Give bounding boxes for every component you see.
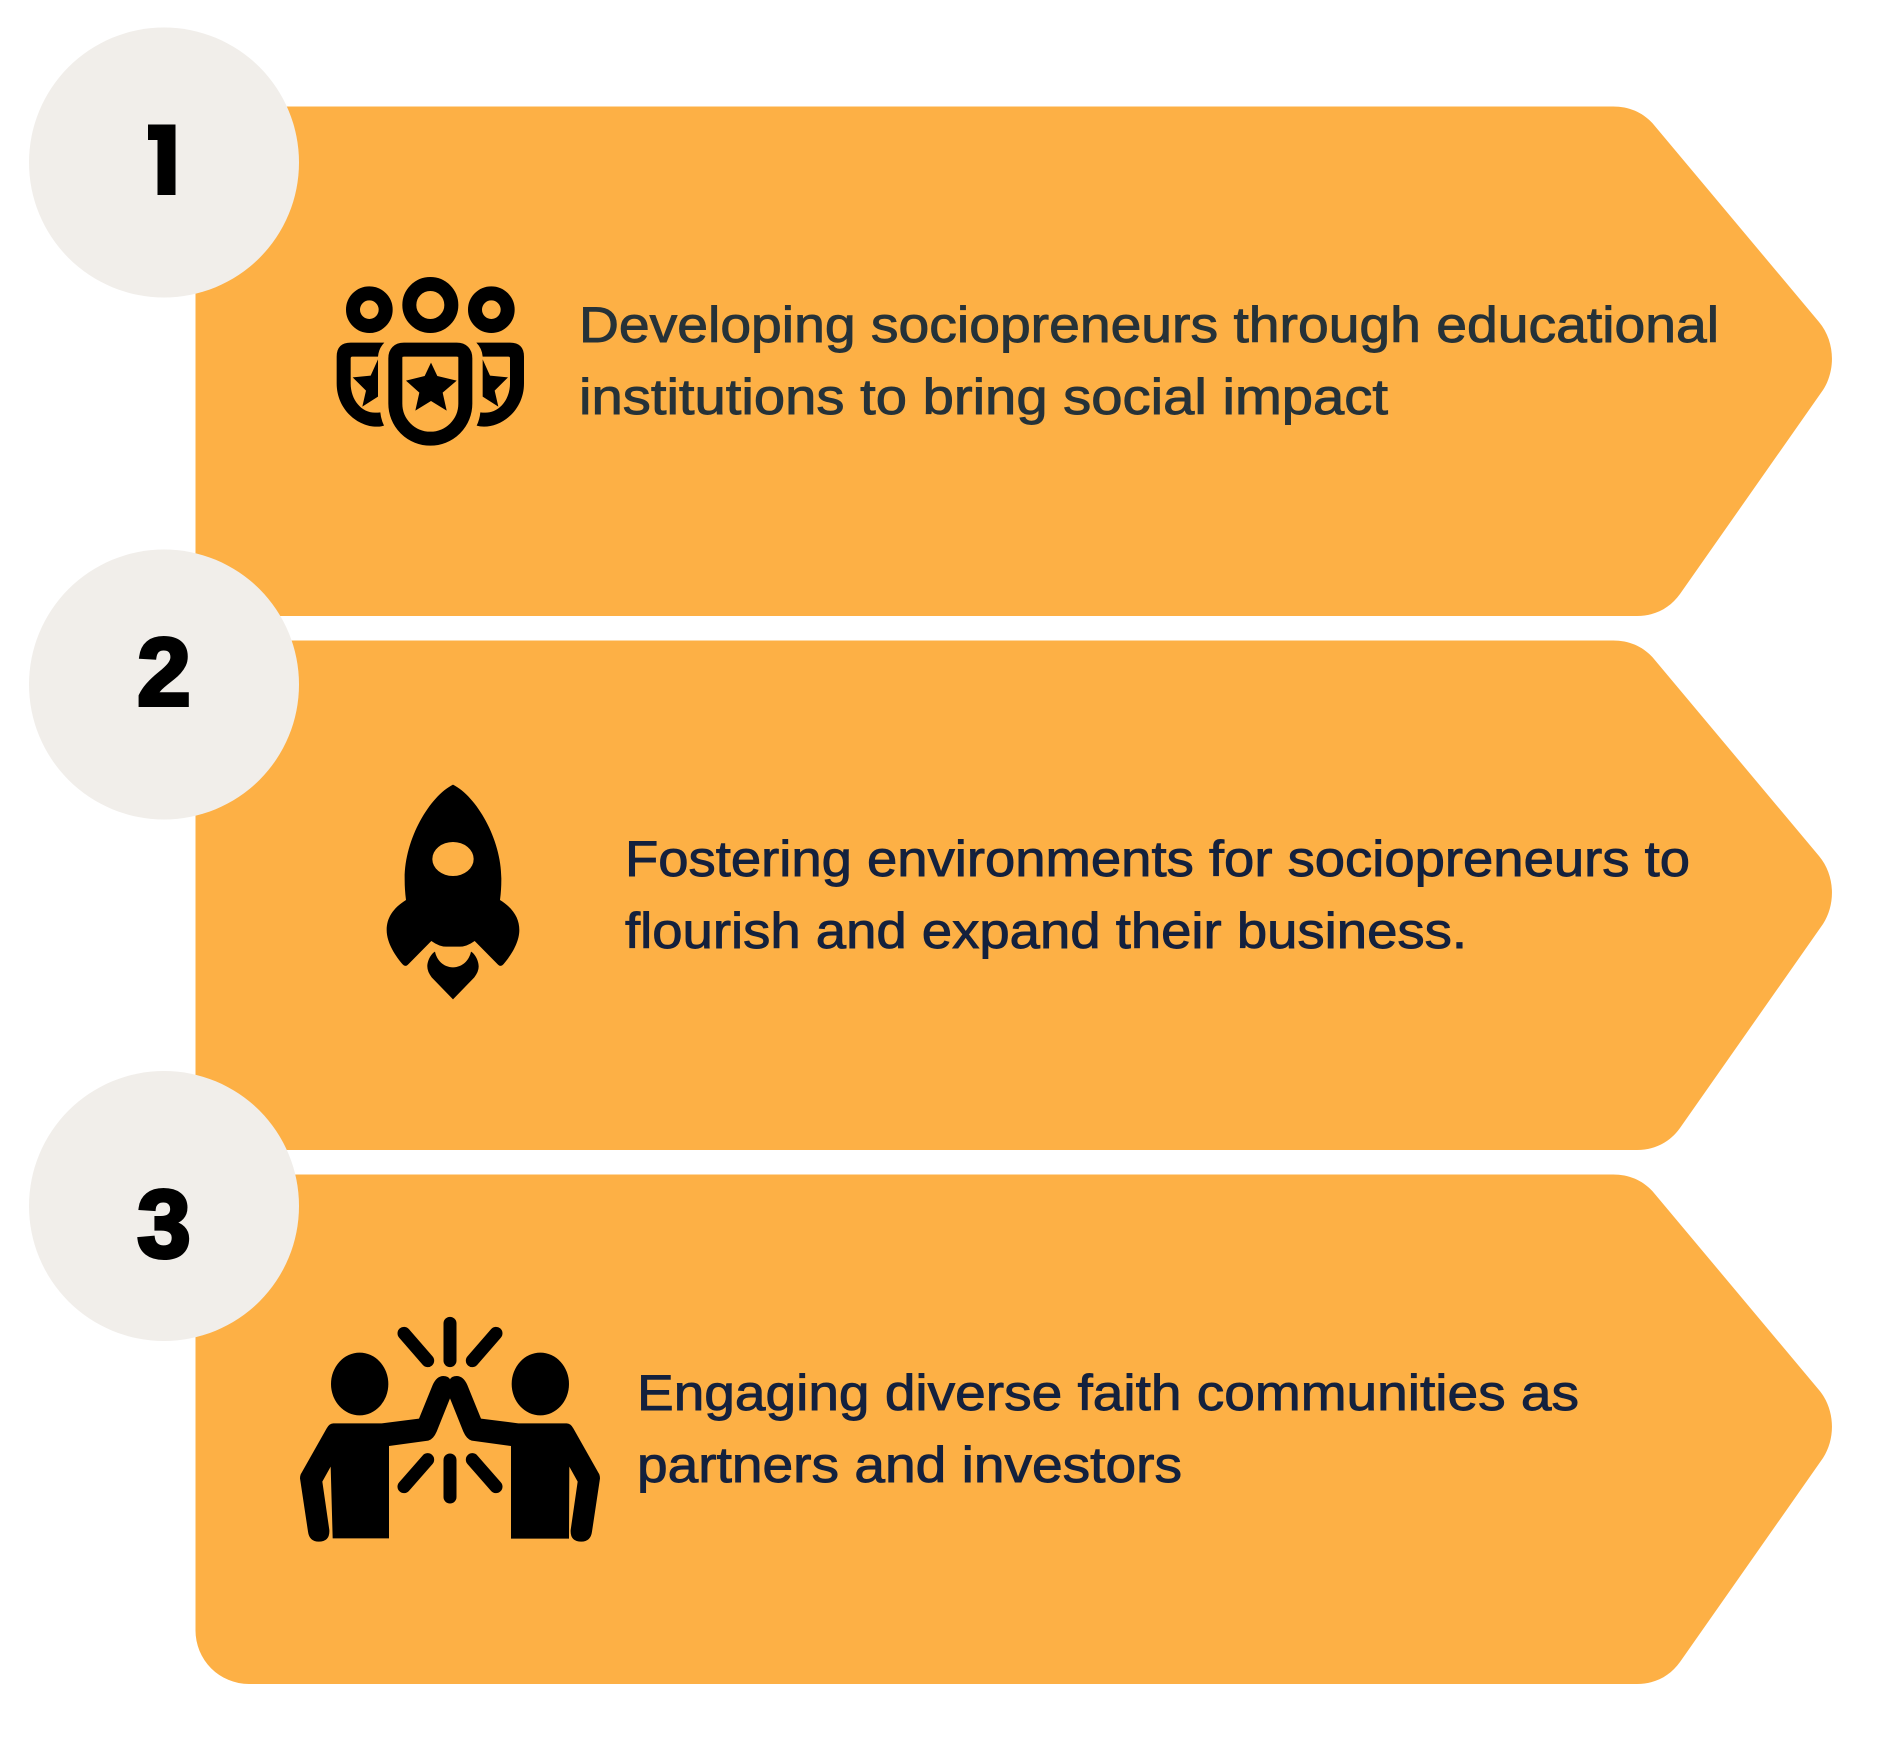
panel: step 1 arrow	[196, 106, 1832, 616]
icon: team with star shields	[337, 284, 524, 439]
panel: step 3 arrow	[196, 1174, 1832, 1684]
panel: step 2 arrow	[196, 640, 1832, 1150]
number badge 3	[29, 1071, 299, 1341]
number badge 2: 2	[137, 619, 191, 726]
text block: step 2	[625, 831, 1690, 959]
number badge 2	[29, 550, 299, 820]
text block: step 2: flourish and expand their business.	[625, 903, 1467, 959]
number badge 1: 1	[136, 103, 192, 217]
icon: two people high five	[300, 1323, 600, 1542]
icon: rocket	[387, 785, 519, 999]
number badge 3: 3	[137, 1171, 191, 1278]
text block: step 3	[637, 1365, 1579, 1493]
number badge 1	[29, 28, 299, 298]
text block: step 1	[579, 297, 1719, 425]
text block: step 3: partners and investors	[637, 1437, 1182, 1493]
text block: step 1: institutions to bring social impact	[579, 369, 1388, 425]
text block: step 3: Engaging diverse faith communities as	[637, 1365, 1579, 1421]
text block: step 1: Developing sociopreneurs through educational	[579, 297, 1719, 353]
text block: step 2: Fostering environments for sociopreneurs to	[625, 831, 1690, 887]
